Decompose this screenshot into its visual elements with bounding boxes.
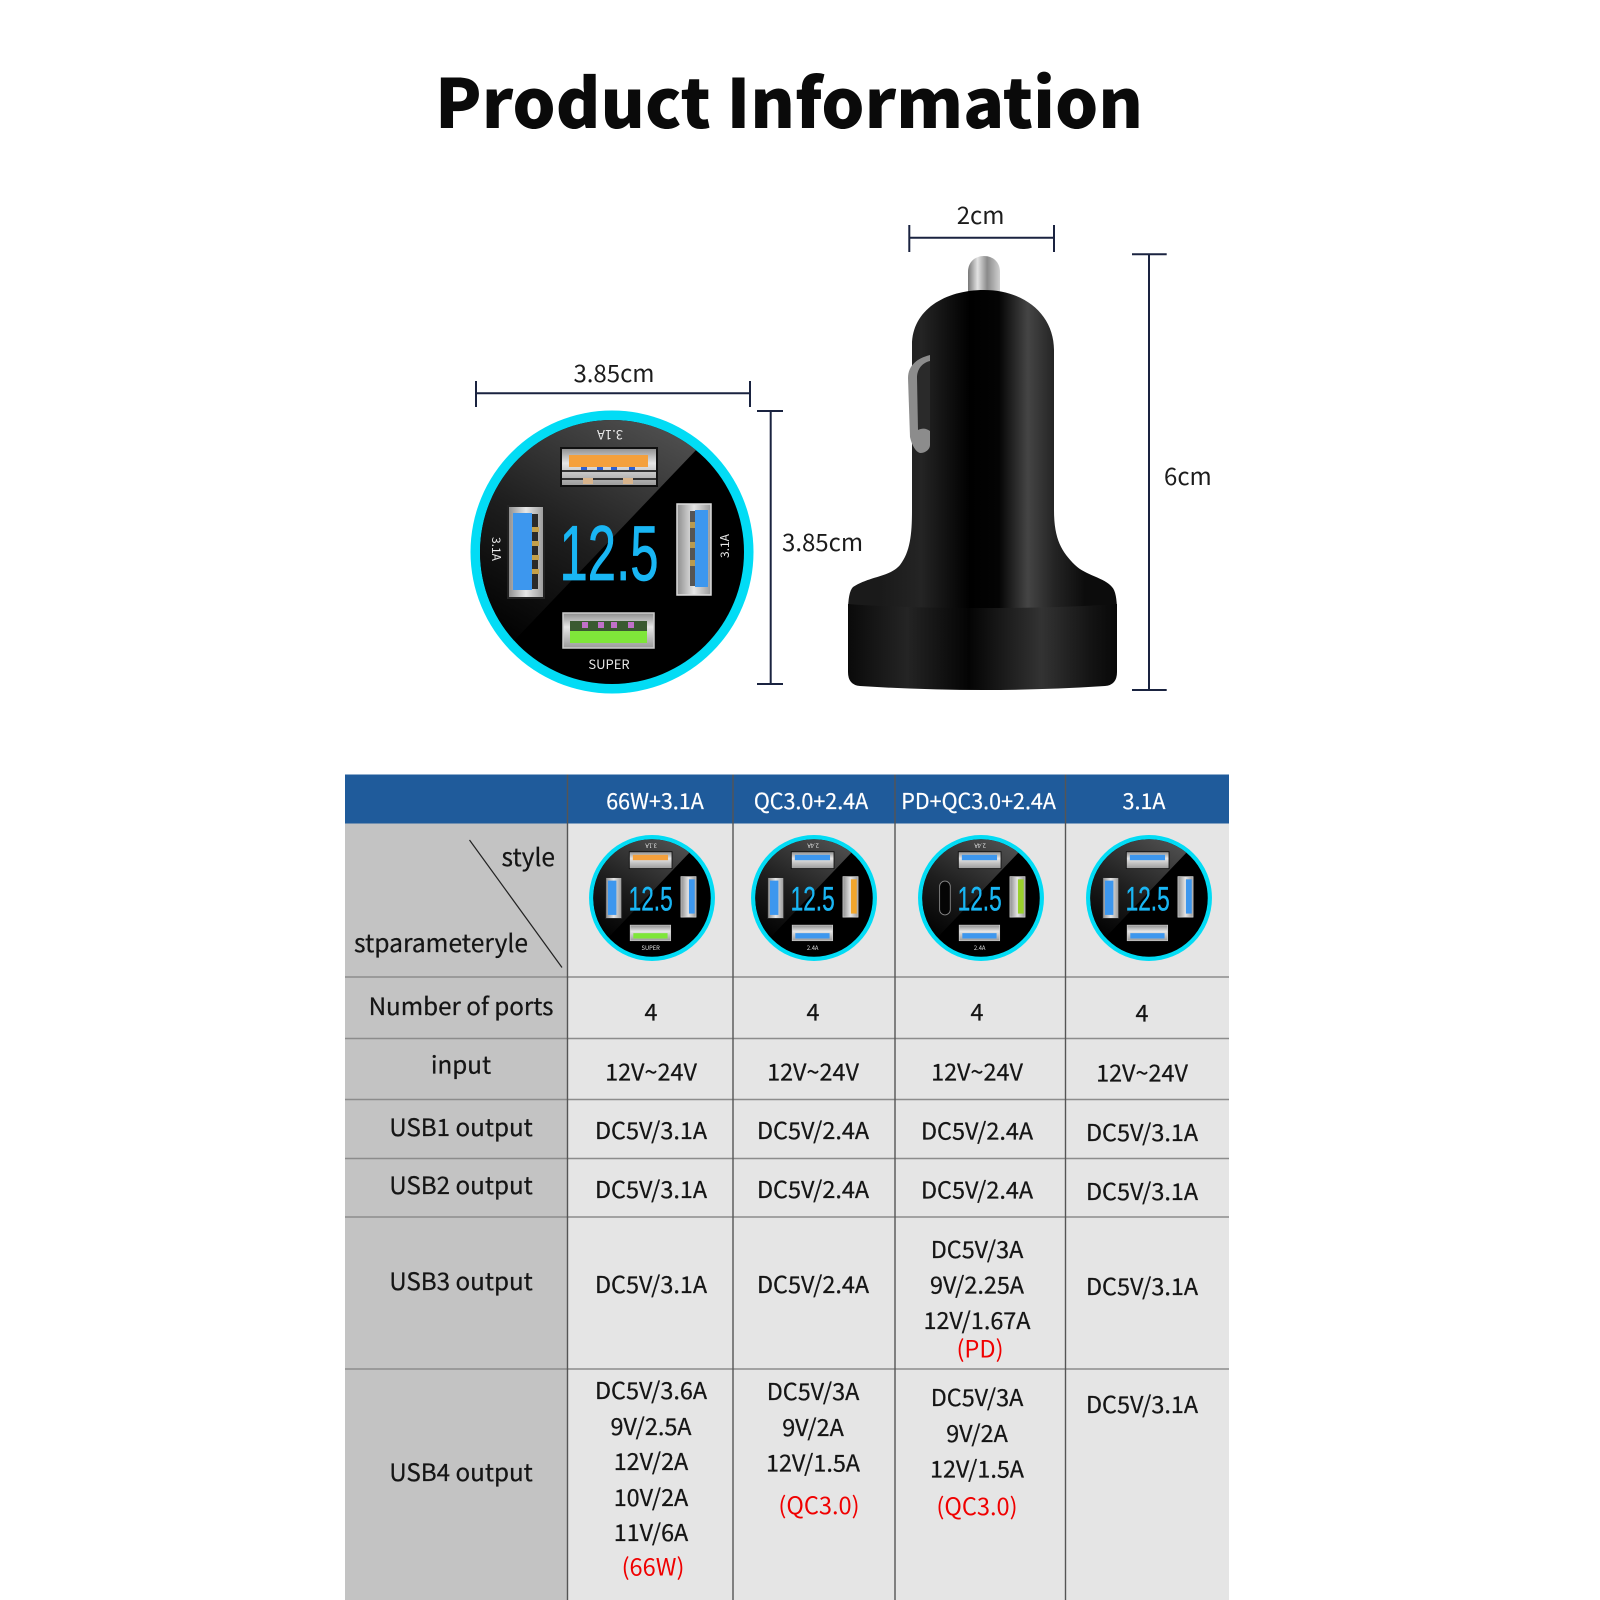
- column: PD+QC3.0+2.4A values: 12V~24V: [931, 1054, 1023, 1088]
- column: QC3.0+2.4A values: DC5V/2.4A: [757, 1112, 870, 1146]
- USB port bottom: [563, 613, 654, 648]
- column: 3.1A values: DC5V/3.1A: [1086, 1268, 1199, 1302]
- USB port top: [561, 448, 657, 486]
- style icon: PD+QC3.0+2.4A: [918, 835, 1044, 961]
- header row: PD+QC3.0+2.4A: [901, 785, 1056, 816]
- column: PD+QC3.0+2.4A values: 4: [971, 994, 984, 1028]
- column: 66W+3.1A values: 12V/2A: [614, 1443, 689, 1477]
- style icon: 66W+3.1A: 3.1A: [645, 842, 657, 851]
- charger base: [848, 604, 1117, 690]
- column: PD+QC3.0+2.4A values: DC5V/3A: [931, 1231, 1024, 1265]
- style icon: PD+QC3.0+2.4A: 2.4A: [974, 842, 986, 851]
- column: 3.1A values: [1086, 994, 1199, 1420]
- header row: [606, 785, 1165, 816]
- charger side view: [848, 256, 1117, 690]
- USB port right: [677, 504, 711, 595]
- dimension: front width 3.85cm: 3.85cm: [573, 354, 655, 389]
- row labels: USB1 output: [389, 1108, 533, 1143]
- style icon: PD+QC3.0+2.4A: 12.5: [958, 880, 1002, 918]
- header row: QC3.0+2.4A: [754, 785, 868, 816]
- port labels: SUPER: [588, 654, 630, 673]
- style icon: PD+QC3.0+2.4A: 2.4A: [974, 943, 986, 952]
- port labels: 3.1A: [716, 533, 733, 558]
- column: 66W+3.1A values: DC5V/3.1A: [595, 1112, 708, 1146]
- title: Product Information: [435, 49, 1143, 148]
- style icon: 66W+3.1A: 12.5: [629, 880, 673, 918]
- column: PD+QC3.0+2.4A values: (QC3.0): [936, 1488, 1018, 1522]
- column: PD+QC3.0+2.4A values: 12V/1.5A: [930, 1451, 1025, 1485]
- column: 3.1A values: 4: [1136, 994, 1149, 1028]
- column: 66W+3.1A values: DC5V/3.6A: [595, 1372, 708, 1406]
- row labels: USB3 output: [389, 1262, 533, 1297]
- column: 66W+3.1A values: 10V/2A: [614, 1479, 689, 1513]
- column: QC3.0+2.4A values: 12V/1.5A: [766, 1444, 861, 1478]
- charger front view: [470, 410, 754, 694]
- column: PD+QC3.0+2.4A values: (PD): [956, 1330, 1004, 1364]
- port labels: [488, 426, 733, 673]
- USB port left: [508, 506, 544, 598]
- style icon: QC3.0+2.4A: 12.5: [791, 880, 835, 918]
- style icon: 66W+3.1A: SUPER: [642, 943, 660, 952]
- dimension: side width 2cm: [909, 196, 1054, 252]
- column: 66W+3.1A values: 9V/2.5A: [610, 1408, 692, 1442]
- dimension: side height 6cm: 6cm: [1164, 457, 1212, 492]
- diagonal header cell: style: [502, 839, 555, 874]
- column: PD+QC3.0+2.4A values: 9V/2.25A: [930, 1266, 1025, 1300]
- column: QC3.0+2.4A values: DC5V/2.4A: [757, 1266, 870, 1300]
- port labels: 3.1A: [488, 537, 505, 562]
- column: 3.1A values: DC5V/3.1A: [1086, 1173, 1199, 1207]
- header row: 3.1A: [1123, 785, 1165, 816]
- style icon: 3.1A: 12.5: [1126, 880, 1170, 918]
- column: 3.1A values: DC5V/3.1A: [1086, 1386, 1199, 1420]
- column: 66W+3.1A values: 11V/6A: [614, 1514, 689, 1548]
- column: QC3.0+2.4A values: DC5V/2.4A: [757, 1171, 870, 1205]
- column: PD+QC3.0+2.4A values: [921, 994, 1034, 1522]
- row labels: USB2 output: [389, 1166, 533, 1201]
- column: 66W+3.1A values: [595, 994, 708, 1582]
- diagonal header cell: [354, 839, 562, 968]
- column: 3.1A values: 12V~24V: [1096, 1055, 1188, 1089]
- column: QC3.0+2.4A values: [757, 994, 870, 1521]
- style icon: 3.1A: [1086, 835, 1212, 961]
- column: 66W+3.1A values: 4: [645, 994, 658, 1028]
- row labels: [369, 987, 553, 1488]
- column: PD+QC3.0+2.4A values: DC5V/2.4A: [921, 1172, 1034, 1206]
- style icon: QC3.0+2.4A: 2.4A: [807, 943, 819, 952]
- style icon: QC3.0+2.4A: 2.4A: [807, 842, 819, 851]
- column: 3.1A values: DC5V/3.1A: [1086, 1114, 1199, 1148]
- row labels: input: [431, 1046, 491, 1080]
- dimension: side width 2cm: 2cm: [957, 196, 1004, 231]
- column: QC3.0+2.4A values: (QC3.0): [778, 1487, 860, 1521]
- LED voltage display: 12.5: [560, 509, 658, 597]
- column: 66W+3.1A values: 12V~24V: [605, 1054, 697, 1088]
- header row: 66W+3.1A: [606, 785, 704, 816]
- column: PD+QC3.0+2.4A values: 9V/2A: [946, 1415, 1009, 1449]
- metal side clip: [908, 355, 930, 453]
- dimension: side height 6cm: [1132, 254, 1212, 690]
- column: QC3.0+2.4A values: DC5V/3A: [767, 1373, 860, 1407]
- row labels: USB4 output: [389, 1453, 533, 1488]
- table backgrounds: [345, 774, 1229, 1600]
- dimension: front height 3.85cm: [757, 411, 863, 684]
- column: QC3.0+2.4A values: 4: [807, 994, 820, 1028]
- column: QC3.0+2.4A values: 9V/2A: [782, 1409, 845, 1443]
- dimension: front height 3.85cm: 3.85cm: [782, 523, 863, 558]
- column: 66W+3.1A values: (66W): [622, 1548, 684, 1582]
- charger body: [848, 290, 1117, 612]
- row labels: Number of ports: [369, 987, 553, 1022]
- column: 66W+3.1A values: DC5V/3.1A: [595, 1171, 708, 1205]
- style icon: QC3.0+2.4A: [751, 835, 877, 961]
- style icon: 66W+3.1A: [589, 835, 715, 961]
- column: PD+QC3.0+2.4A values: DC5V/3A: [931, 1379, 1024, 1413]
- column: QC3.0+2.4A values: 12V~24V: [767, 1054, 859, 1088]
- dimension: front width 3.85cm: [476, 354, 750, 407]
- column: 66W+3.1A values: DC5V/3.1A: [595, 1266, 708, 1300]
- column: PD+QC3.0+2.4A values: DC5V/2.4A: [921, 1112, 1034, 1146]
- diagonal header cell: stparameteryle: [354, 924, 528, 960]
- column: PD+QC3.0+2.4A values: 12V/1.67A: [923, 1302, 1031, 1336]
- specification table: [345, 774, 1229, 1600]
- metal tip: [968, 256, 1000, 295]
- port labels: 3.1A: [597, 426, 623, 445]
